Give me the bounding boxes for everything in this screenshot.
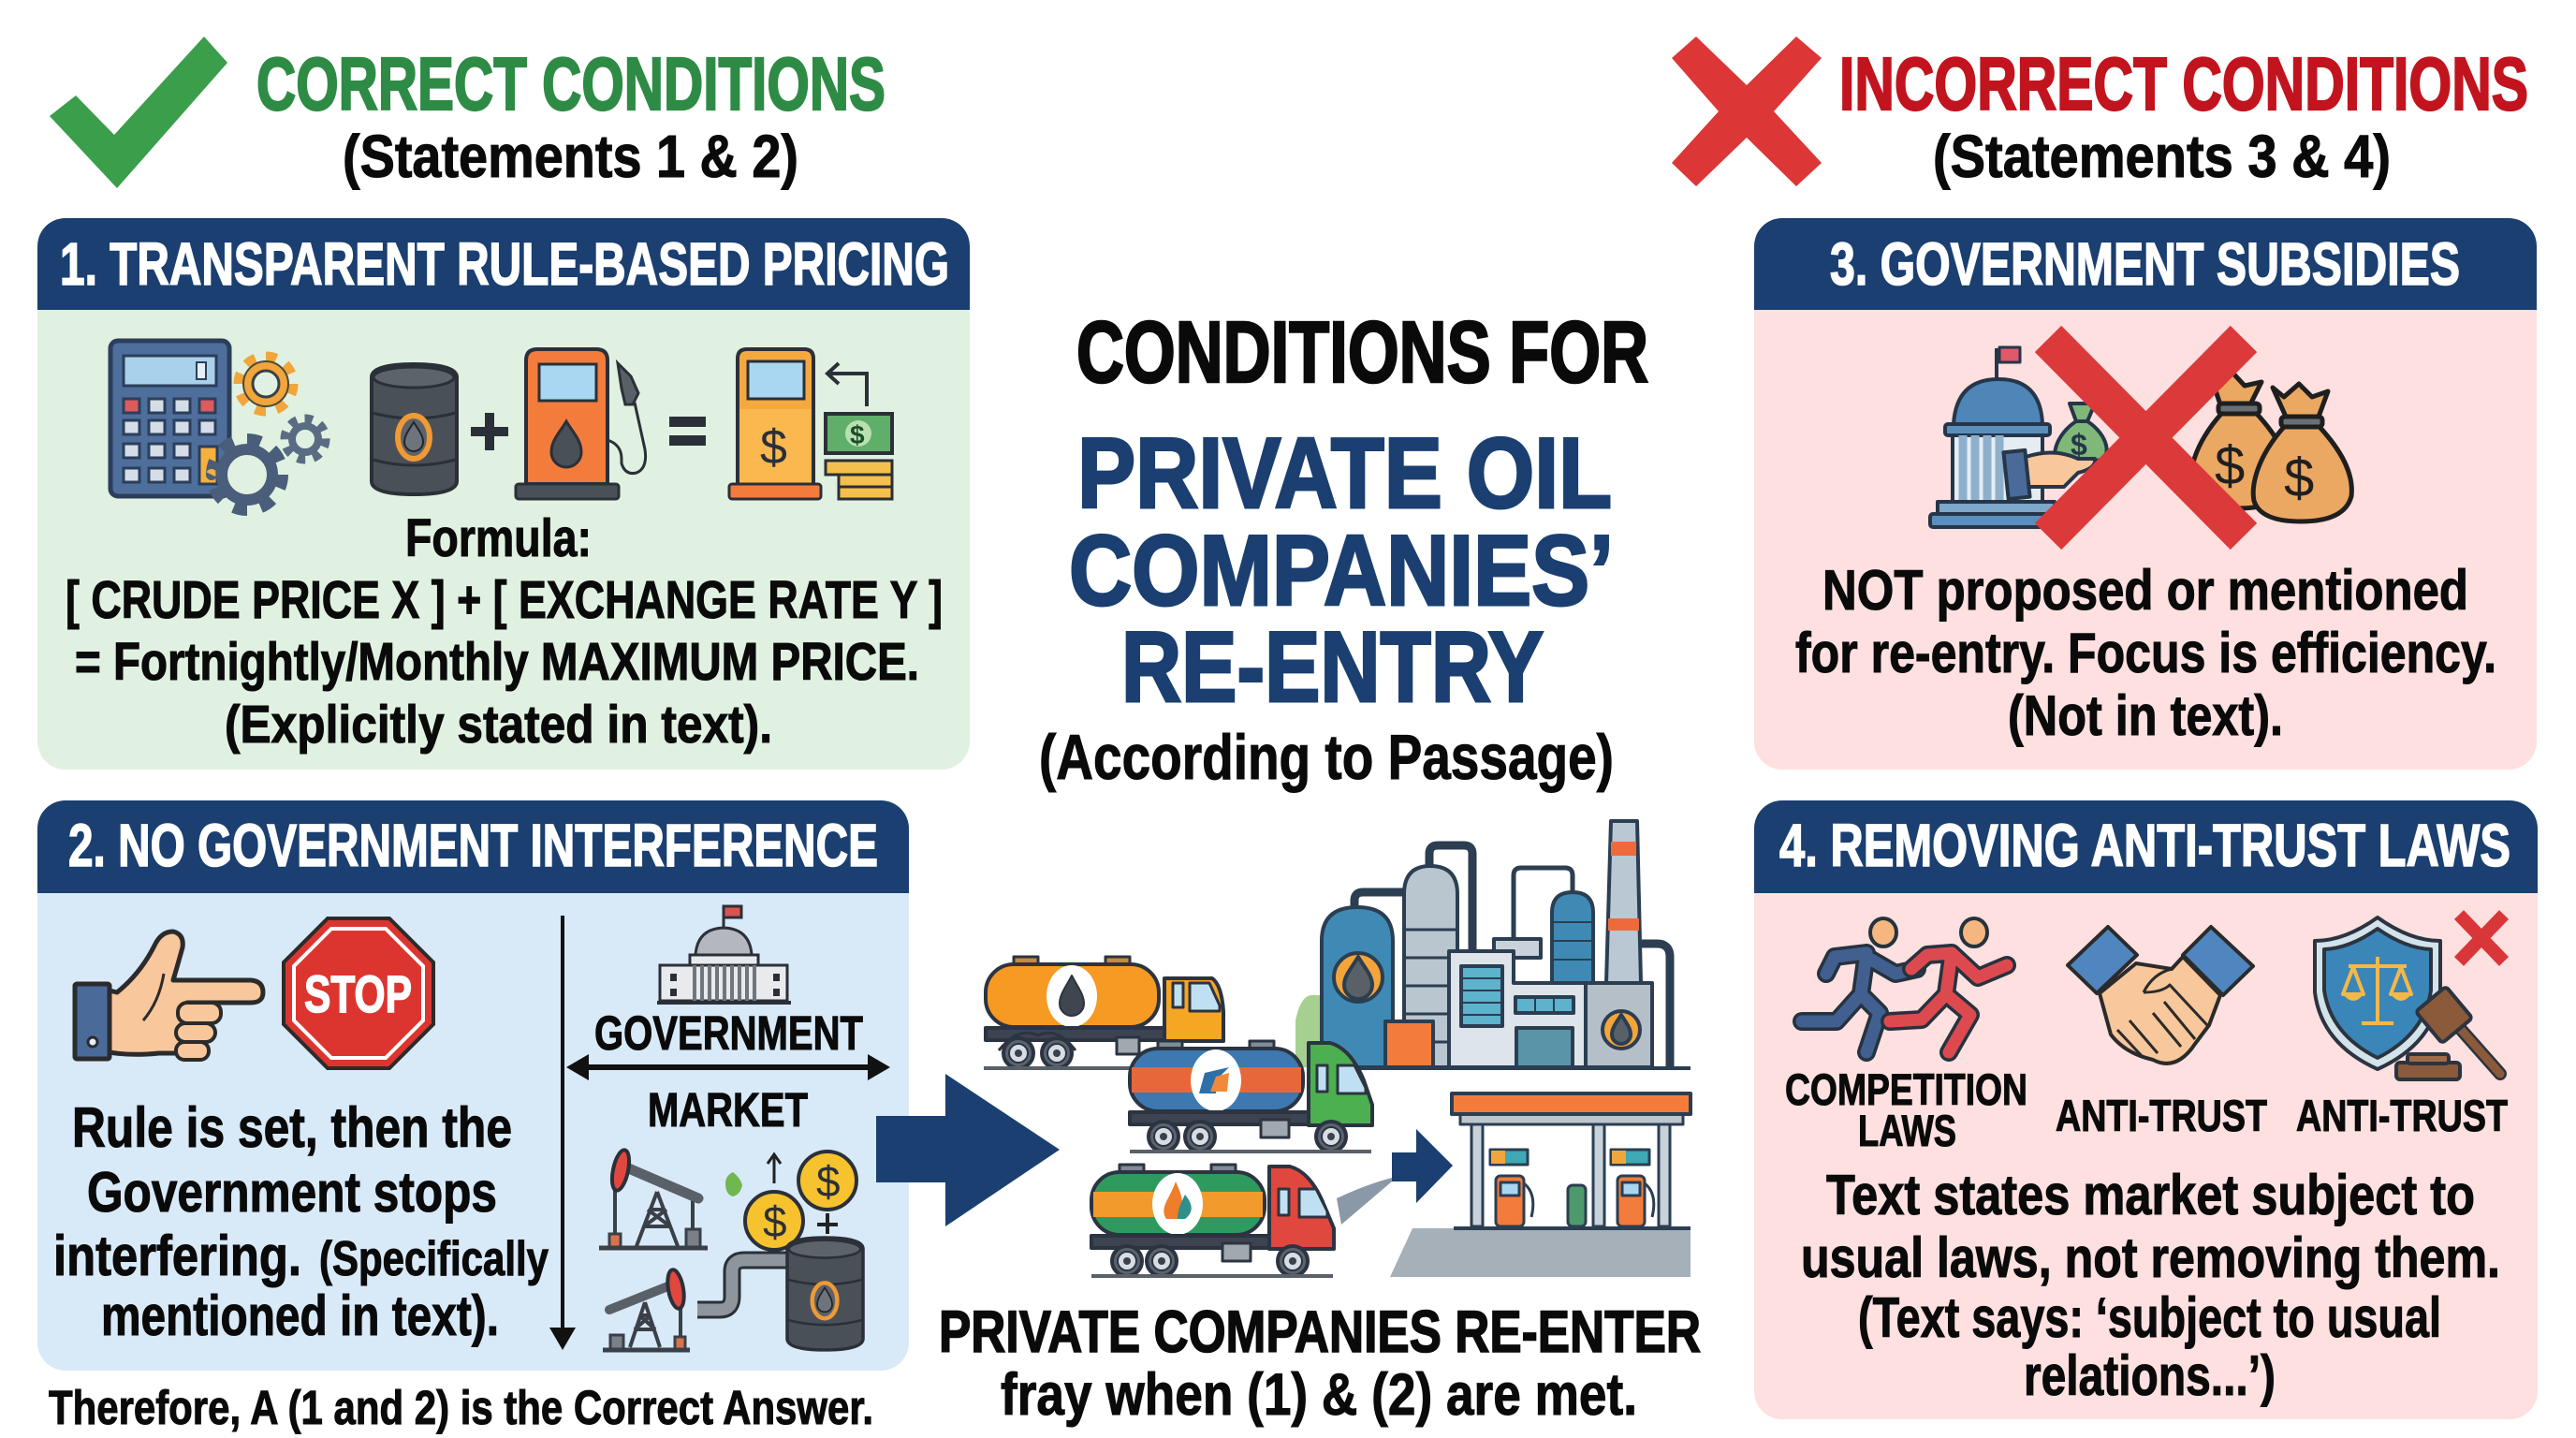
heading: incorrect conditions: (Statements 3 & 4) [1933,123,2391,190]
illustration: blue tanker truck [1130,1041,1372,1152]
central title: COMPANIES’ [1069,514,1614,626]
illustration: refinery [1295,821,1690,1068]
label: market: MARKET [648,1083,808,1137]
central title: (According to Passage) [1039,722,1614,793]
icon labels [1785,1064,2508,1155]
heading: correct conditions: (Statements 1 & 2) [343,123,798,190]
arrow: large navy [876,1074,1060,1226]
icon: priced fuel pump [729,349,821,499]
rule text: interfering. [53,1225,301,1287]
panel 2 heading: 2. NO GOVERNMENT INTERFERENCE [68,812,878,879]
central title [1039,303,1648,793]
rule text: (Specifically [319,1232,549,1286]
formula text: (Explicitly stated in text). [225,695,772,755]
formula text: Formula: [405,508,592,568]
icon: coins and sprout: $ [816,1157,841,1206]
heading: incorrect conditions [1839,42,2528,190]
icon labels: LAWS [1858,1106,1956,1155]
panel 4: removing anti-trust laws [1754,800,2538,1419]
panel 1 heading: 1. TRANSPARENT RULE-BASED PRICING [60,230,949,298]
panel 3: government subsidies [1754,218,2537,770]
caption: private companies re-enter: fray when (1) & (2) are met. [1001,1362,1637,1428]
rule text [53,1096,549,1347]
heading: correct conditions [256,42,886,190]
icon labels: ANTI-TRUST [2296,1091,2508,1140]
label: government: GOVERNMENT [594,1006,863,1060]
icon: green check mark [50,37,227,188]
icon labels: COMPETITION [1785,1064,2027,1114]
icon: pipe [697,1260,787,1310]
icon: money and coins with arrow [826,363,892,499]
panel 3 text: (Not in text). [2008,684,2283,747]
icon: large red cross [2048,339,2244,536]
conclusion text: Therefore, A (1 and 2) is the Correct Answer. [49,1381,873,1434]
central title: CONDITIONS FOR [1076,303,1648,401]
heading: correct conditions: CORRECT CONDITIONS [256,42,886,125]
illustration: gas station [1390,1093,1690,1277]
icon: priced fuel pump: $ [760,420,787,475]
formula text: [ CRUDE PRICE X ] + [ EXCHANGE RATE Y ] [66,570,943,630]
icon: money bags [2190,373,2351,521]
caption: private companies re-enter: PRIVATE COMPANIES RE-ENTER [939,1299,1701,1365]
icon: stop sign [284,918,433,1068]
icon: money and coins with arrow: $ [850,420,865,449]
icon: money bags: $ [2284,448,2314,508]
icon: oil pumpjack two [603,1269,690,1350]
formula text: = Fortnightly/Monthly MAXIMUM PRICE. [75,632,919,692]
icon: market oil barrel [787,1238,863,1350]
icon: handshake [2068,927,2253,1064]
icon: coins and sprout [725,1152,856,1250]
equals sign [669,417,706,446]
panel 4 text: Text states market subject to [1826,1164,2475,1226]
icon: government building [657,905,791,1003]
icon: coins and sprout: $ [763,1197,787,1246]
icon: stop sign: STOP [304,964,412,1023]
icon: pointing hand [75,932,263,1060]
icon: red cross [1672,37,1822,186]
vertical divider arrow [561,916,564,1329]
icon: oil pumpjack one [599,1149,708,1248]
arrow: small navy to station [1337,1129,1453,1225]
icon: oil barrel [372,364,457,494]
panel 4 text: relations...’) [2024,1344,2276,1407]
illustration: green tanker truck [1091,1165,1334,1276]
rule text: Government stops [87,1161,497,1224]
horizontal divider arrow [566,1054,890,1080]
plus sign [471,413,508,450]
icon labels: ANTI-TRUST [2056,1091,2267,1140]
illustration: orange tanker truck [984,957,1223,1068]
icon: justice shield and gavel [2315,917,2500,1079]
icon: money bags: $ [2215,435,2245,496]
panel 4 text [1801,1164,2500,1407]
icon: calculator with gears [110,341,326,510]
icon: orange fuel pump [516,349,646,499]
icon: government building with hand and bag [1930,347,2107,527]
panel 3 text [1795,559,2496,747]
central title: RE-ENTRY [1121,610,1544,723]
icon: small red cross [2459,915,2504,961]
formula text [66,508,943,755]
rule text: mentioned in text). [101,1284,499,1347]
caption: private companies re-enter [939,1299,1701,1428]
rule text: Rule is set, then the [72,1096,512,1159]
panel 2: no government interference [37,800,909,1371]
panel 3 text: NOT proposed or mentioned [1822,559,2468,622]
central title: PRIVATE OIL [1077,417,1612,529]
icon: running competitors [1802,918,2007,1052]
panel 1: transparent rule-based pricing [37,218,970,770]
icon: government building with hand and bag: $ [2071,428,2087,462]
